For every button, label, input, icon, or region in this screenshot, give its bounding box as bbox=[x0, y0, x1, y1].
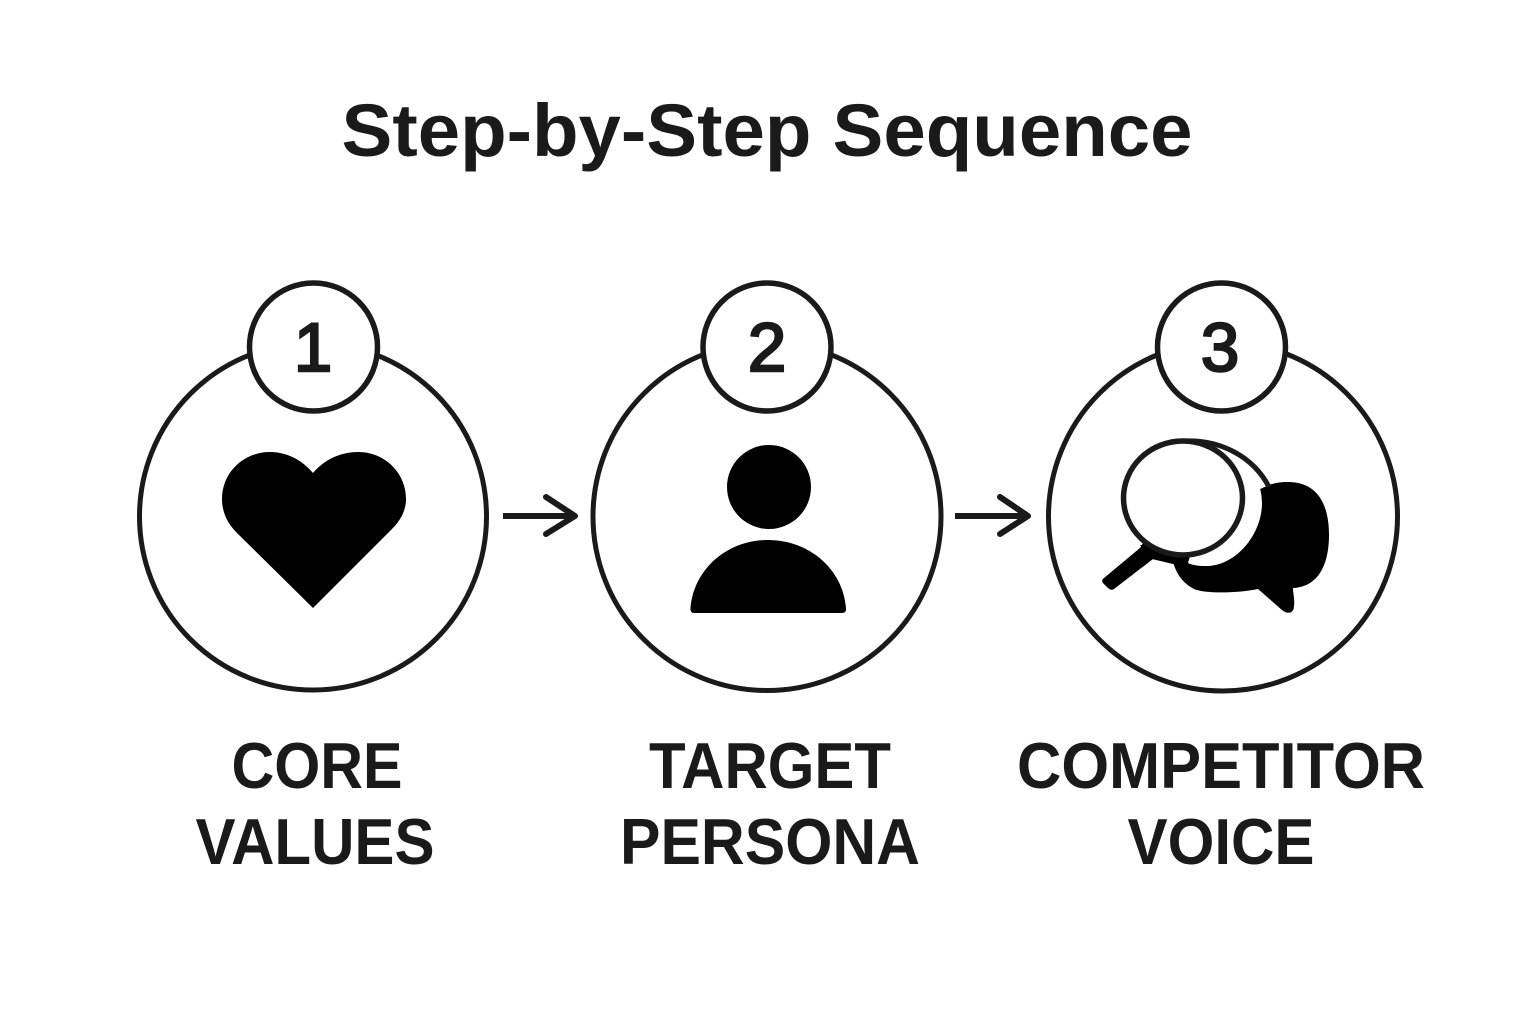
icon: person bbox=[690, 445, 846, 613]
step 1 number badge: 1 bbox=[294, 309, 332, 386]
step 3 number badge bbox=[1158, 283, 1286, 411]
step 3 main circle bbox=[1048, 342, 1398, 691]
step 3 number badge: 3 bbox=[1201, 309, 1239, 386]
step 1 label: VALUES bbox=[196, 805, 434, 878]
step 3 label: COMPETITOR bbox=[1017, 729, 1425, 802]
icon: magnifier and speech bubble bbox=[1102, 441, 1329, 613]
arrow: step 1 to step 2 bbox=[503, 497, 575, 534]
step 1 label bbox=[196, 729, 434, 878]
step 2 label bbox=[620, 729, 920, 878]
step 3 label bbox=[1017, 729, 1425, 878]
panel: step 3 competitor voice bbox=[1017, 283, 1425, 878]
panel: step 2 target persona bbox=[593, 283, 941, 878]
icon: heart bbox=[222, 452, 406, 608]
step 2 number badge bbox=[703, 283, 831, 411]
step 1 number badge bbox=[250, 283, 378, 411]
step 2 label: TARGET bbox=[649, 729, 891, 802]
title: Step-by-Step Sequence bbox=[342, 89, 1192, 172]
step 3 label: VOICE bbox=[1128, 805, 1314, 878]
arrow: step 2 to step 3 bbox=[955, 497, 1028, 534]
step 1 label: CORE bbox=[232, 729, 402, 802]
step 1 main circle bbox=[140, 343, 486, 690]
step 2 main circle bbox=[593, 342, 941, 690]
panel: step 1 core values bbox=[140, 283, 486, 878]
step 2 label: PERSONA bbox=[620, 805, 920, 878]
step 2 number badge: 2 bbox=[748, 309, 786, 386]
